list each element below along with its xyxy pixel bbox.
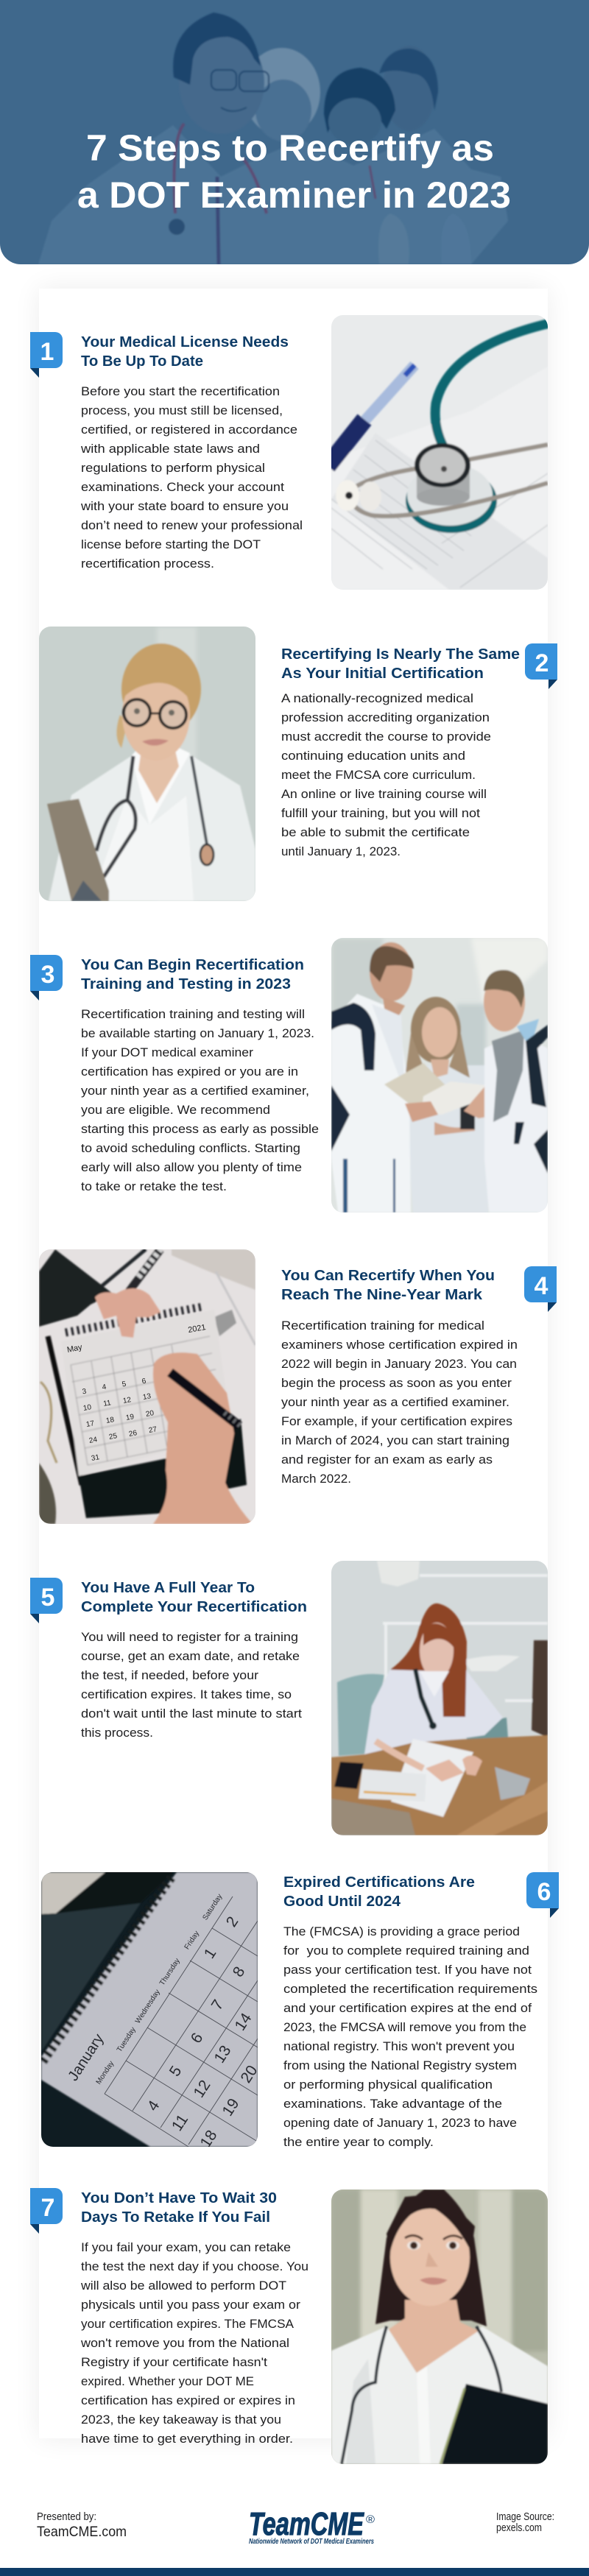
- footer bar: [0, 2568, 589, 2576]
- calendar date numbers: 13: [142, 1392, 152, 1402]
- body text: Before you start the recertification: [81, 385, 280, 398]
- number badge 3: [30, 955, 63, 1001]
- heading: You Have A Full Year To: [81, 1580, 255, 1596]
- calendar numbers and labels: 13: [211, 2042, 235, 2067]
- footer: image source: Image Source:: [496, 2511, 554, 2523]
- body text: [281, 1319, 518, 1486]
- calendar grid lines: [105, 1896, 258, 2147]
- body text: Registry if your certificate hasn't: [81, 2356, 267, 2369]
- heading: [281, 646, 520, 682]
- photo: red-haired doctor writing at a desk: [331, 1561, 548, 1835]
- calendar numbers and labels: 11: [169, 2111, 191, 2134]
- photo: doctor holding a black folder: [331, 2189, 548, 2464]
- body text: completed the recertification requirements: [283, 1983, 537, 1996]
- calendar numbers and labels: 7: [208, 1997, 227, 2014]
- number badge 4: [524, 1266, 557, 1312]
- heading: [81, 2190, 277, 2226]
- body text: A nationally-recognized medical: [281, 692, 473, 705]
- number badge 7: [30, 2188, 63, 2234]
- step 2: [39, 627, 557, 901]
- heading: Your Medical License Needs: [81, 334, 289, 350]
- calendar date numbers: 26: [128, 1429, 138, 1439]
- heading: [281, 1268, 495, 1303]
- body text: the test the next day if you choose. You: [81, 2260, 308, 2273]
- step 6: [41, 1872, 559, 2151]
- photo: January wall calendar: [41, 1872, 261, 2151]
- heading: You Can Recertify When You: [281, 1268, 495, 1284]
- number badge 5: 5: [41, 1584, 54, 1612]
- body text: [80, 385, 303, 571]
- body text: 2022 will begin in January 2023. You can: [281, 1358, 517, 1371]
- footer: TeamCME logo: Nationwide Network of DOT Medical Examiners: [249, 2538, 374, 2546]
- calendar date numbers: 27: [148, 1425, 158, 1435]
- number badge 2: 2: [535, 649, 549, 677]
- body text: March 2022.: [281, 1472, 351, 1486]
- number badge 2: [525, 643, 557, 689]
- calendar date numbers: 11: [102, 1399, 112, 1408]
- body text: fulfill your training, but you will not: [281, 807, 480, 820]
- calendar numbers and labels: [65, 1893, 261, 2151]
- calendar numbers and labels: Friday: [183, 1930, 201, 1951]
- header photo: team of doctors in blue tint: [0, 0, 589, 264]
- body text: must accredit the course to provide: [281, 730, 491, 744]
- body text: certification has expired or you are in: [81, 1065, 298, 1079]
- body text: in March of 2024, you can start training: [281, 1434, 509, 1447]
- body text: recertification process.: [81, 557, 214, 571]
- calendar date numbers: 25: [108, 1432, 118, 1441]
- body text: license before starting the DOT: [81, 538, 261, 551]
- body text: regulations to perform physical: [81, 462, 265, 475]
- body text: [81, 1008, 319, 1193]
- heading: Expired Certifications Are: [283, 1874, 475, 1891]
- heading: [283, 1874, 475, 1910]
- body text: 2023, the FMCSA will remove you from the: [283, 2021, 526, 2034]
- calendar numbers and labels: Saturday: [201, 1893, 224, 1922]
- number badge 6: 6: [537, 1878, 551, 1906]
- body text: opening date of January 1, 2023 to have: [283, 2117, 517, 2130]
- body text: the entire year to comply.: [283, 2136, 434, 2149]
- body text: profession accrediting organization: [281, 711, 490, 724]
- body text: Recertification training for medical: [281, 1319, 484, 1333]
- step 7: [30, 2188, 548, 2464]
- heading: You Don’t Have To Wait 30: [81, 2190, 277, 2206]
- body text: certification expires. It takes time, so: [81, 1688, 292, 1701]
- body text: don’t need to renew your professional: [81, 519, 303, 532]
- calendar date numbers: 12: [122, 1396, 132, 1405]
- heading: Good Until 2024: [283, 1894, 401, 1910]
- calendar numbers and labels: 2: [223, 1913, 241, 1930]
- body text: An online or live training course will: [281, 788, 487, 801]
- body text: won't remove you from the National: [80, 2337, 289, 2350]
- calendar numbers and labels: Wednesday: [134, 1989, 162, 2025]
- body text: will also be allowed to perform DOT: [80, 2279, 286, 2293]
- body text: [81, 1631, 302, 1740]
- calendar numbers and labels: Monday: [95, 2060, 116, 2086]
- body text: be available starting on January 1, 2023.: [81, 1027, 314, 1040]
- footer: presented by: Presented by:: [37, 2511, 96, 2523]
- body text: national registry. This won't prevent you: [283, 2040, 515, 2053]
- body text: your certification expires. The FMCSA: [81, 2318, 294, 2331]
- calendar numbers and labels: 19: [219, 2095, 243, 2120]
- step 5: [30, 1561, 548, 1835]
- calendar date numbers: 2021: [187, 1323, 207, 1335]
- body text: You will need to register for a training: [81, 1631, 298, 1644]
- calendar numbers and labels: 1: [201, 1945, 219, 1962]
- body text: with your state board to ensure you: [80, 500, 289, 513]
- calendar numbers and labels: 4: [144, 2097, 163, 2114]
- number badge 1: 1: [40, 338, 54, 366]
- panel: white content card: [39, 289, 548, 2438]
- body text: certified, or registered in accordance: [81, 423, 297, 437]
- body text: If your DOT medical examiner: [81, 1046, 254, 1059]
- calendar date numbers: 6: [141, 1377, 147, 1386]
- body text: continuing education units and: [281, 749, 465, 763]
- body text: or performing physical qualification: [283, 2078, 493, 2092]
- body text: course, get an exam date, and retake: [81, 1650, 300, 1663]
- calendar numbers and labels: January: [65, 2031, 107, 2084]
- body text: for you to complete required training and: [283, 1944, 529, 1958]
- heading: You Can Begin Recertification: [81, 957, 304, 973]
- calendar date numbers: 4: [102, 1383, 107, 1391]
- body text: begin the process as soon as you enter: [281, 1377, 512, 1390]
- body text: The (FMCSA) is providing a grace period: [283, 1925, 520, 1938]
- body text: [281, 692, 491, 858]
- body text: you are eligible. We recommend: [81, 1104, 270, 1117]
- footer: presented by: TeamCME.com: [37, 2524, 127, 2540]
- calendar date numbers: 3: [82, 1388, 88, 1396]
- body text: pass your certification test. If you have not: [283, 1963, 532, 1977]
- calendar date numbers: 31: [91, 1453, 100, 1463]
- photo: three medical students with a book: [331, 938, 548, 1213]
- calendar numbers and labels: Tuesday: [116, 2026, 138, 2054]
- number badge 3: 3: [41, 961, 54, 989]
- footer: TeamCME logo: TeamCME: [249, 2506, 364, 2542]
- calendar date numbers: [66, 1323, 207, 1463]
- header banner with title: [0, 0, 589, 264]
- body text: physicals until you pass your exam or: [81, 2298, 301, 2312]
- heading: Training and Testing in 2023: [81, 976, 291, 992]
- footer: image source: [496, 2511, 554, 2534]
- body text: your ninth year as a certified examiner.: [281, 1396, 509, 1409]
- photo: stethoscope on medical form: [328, 315, 560, 590]
- number badge 6: [526, 1872, 559, 1918]
- number badge 5: [30, 1578, 63, 1623]
- heading: [81, 1580, 307, 1615]
- body text: and your certification expires at the end of: [283, 2002, 532, 2015]
- heading: To Be Up To Date: [81, 353, 203, 370]
- body text: starting this process as early as possible: [81, 1123, 319, 1136]
- body text: examiners whose certification expired in: [281, 1338, 518, 1352]
- calendar date numbers: 24: [88, 1436, 98, 1445]
- heading: Reach The Nine-Year Mark: [281, 1287, 483, 1303]
- calendar date numbers: 17: [85, 1419, 95, 1429]
- body text: from using the National Registry system: [283, 2059, 517, 2072]
- calendar numbers and labels: 6: [188, 2030, 206, 2047]
- step 1: [30, 315, 560, 590]
- title: 7 Steps to Recertify as: [86, 127, 494, 169]
- body text: early will also allow you plenty of time: [81, 1161, 302, 1174]
- body text: Recertification training and testing will: [81, 1008, 305, 1021]
- heading: [81, 957, 304, 992]
- photo: hand marking a desk calendar: [39, 1249, 255, 1524]
- heading: Days To Retake If You Fail: [81, 2209, 270, 2226]
- body text: If you fail your exam, you can retake: [81, 2241, 291, 2254]
- calendar numbers and labels: 12: [191, 2077, 214, 2101]
- body text: process, you must still be licensed,: [81, 404, 283, 417]
- body text: certification has expired or expires in: [81, 2394, 295, 2407]
- calendar numbers and labels: 14: [232, 2010, 255, 2034]
- body text: the test, if needed, before your: [81, 1669, 259, 1682]
- calendar date numbers: 5: [121, 1380, 127, 1388]
- heading: Recertifying Is Nearly The Same: [281, 646, 520, 663]
- calendar date numbers: 19: [125, 1413, 135, 1422]
- number badge 1: [30, 332, 63, 378]
- body text: 2023, the key takeaway is that you: [81, 2413, 281, 2427]
- body text: have time to get everything in order.: [81, 2432, 293, 2446]
- calendar date numbers: 20: [145, 1409, 155, 1419]
- body text: and register for an exam as early as: [281, 1453, 493, 1467]
- heading: As Your Initial Certification: [281, 666, 484, 682]
- body text: your ninth year as a certified examiner,: [81, 1084, 309, 1098]
- calendar numbers and labels: 18: [197, 2127, 221, 2151]
- footer: TeamCME logo: ®: [366, 2513, 375, 2526]
- body text: For example, if your certification expires: [281, 1415, 512, 1428]
- body text: examinations. Take advantage of the: [283, 2097, 502, 2111]
- body text: be able to submit the certificate: [281, 826, 470, 839]
- body text: to take or retake the test.: [81, 1180, 227, 1193]
- heading: [81, 334, 289, 370]
- calendar numbers and labels: Thursday: [158, 1957, 182, 1987]
- body text: to avoid scheduling conflicts. Starting: [81, 1142, 300, 1155]
- photo: doctor with glasses and clipboard: [39, 627, 255, 901]
- title: [77, 127, 511, 216]
- calendar date numbers: 10: [82, 1403, 92, 1413]
- body text: this process.: [81, 1726, 153, 1740]
- step 4: [39, 1249, 557, 1524]
- body text: [283, 1925, 537, 2149]
- number badge 4: 4: [535, 1272, 549, 1300]
- calendar numbers and labels: 20: [238, 2062, 261, 2086]
- body text: don't wait until the last minute to start: [81, 1707, 302, 1721]
- calendar numbers and labels: 8: [230, 1963, 248, 1980]
- body text: expired. Whether your DOT ME: [81, 2375, 254, 2388]
- number badge 7: 7: [41, 2194, 54, 2222]
- heading: Complete Your Recertification: [81, 1599, 307, 1615]
- calendar date numbers: May: [66, 1343, 83, 1355]
- step 3: [30, 938, 548, 1213]
- calendar date numbers: 18: [105, 1416, 115, 1425]
- title: a DOT Examiner in 2023: [77, 174, 511, 216]
- body text: examinations. Check your account: [81, 481, 284, 494]
- body text: [80, 2241, 308, 2446]
- body text: with applicable state laws and: [80, 442, 260, 456]
- body text: meet the FMCSA core curriculum.: [281, 769, 476, 782]
- body text: until January 1, 2023.: [281, 845, 401, 858]
- footer: image source: pexels.com: [496, 2522, 542, 2534]
- calendar numbers and labels: 5: [166, 2063, 185, 2080]
- footer: presented by: [37, 2511, 127, 2540]
